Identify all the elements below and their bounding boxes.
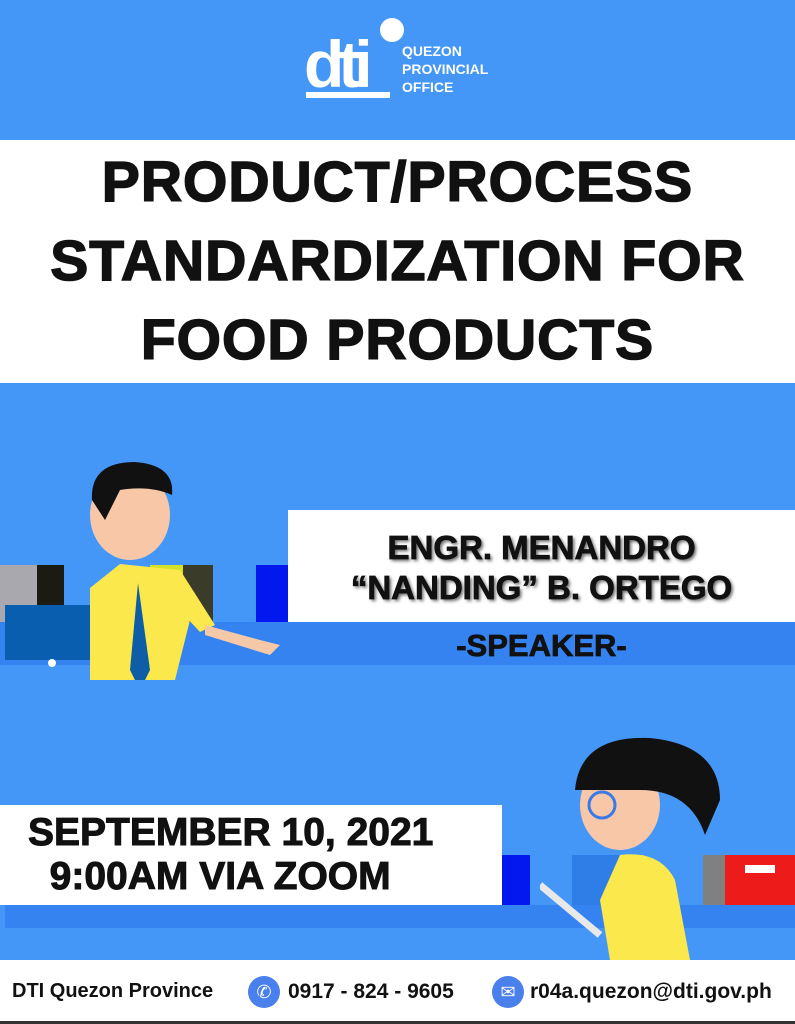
speaker label: -SPEAKER- <box>456 628 627 663</box>
footer <box>0 960 795 1024</box>
boxes bottom shelf <box>502 855 795 905</box>
icon: email <box>492 976 524 1008</box>
logo: text <box>402 43 488 95</box>
icon: phone <box>248 976 280 1008</box>
woman illustration <box>540 738 720 960</box>
title text: STANDARDIZATION FOR <box>50 229 745 293</box>
date text: SEPTEMBER 10, 2021 <box>28 811 433 854</box>
footer: organization: DTI Quezon Province <box>12 980 213 1002</box>
logo <box>304 18 488 101</box>
logo: text: QUEZON <box>402 43 462 59</box>
speaker name: ENGR. MENANDRO <box>387 529 696 566</box>
footer: email: r04a.quezon@dti.gov.ph <box>530 980 772 1003</box>
boxes on top shelf <box>0 565 288 622</box>
date text: 9:00AM VIA ZOOM <box>50 855 391 898</box>
shelf bottom <box>5 905 795 928</box>
speaker name <box>351 529 735 606</box>
footer: phone: 0917 - 824 - 9605 <box>288 980 454 1003</box>
title band <box>0 140 795 383</box>
title text <box>50 150 745 372</box>
icon: phone: ✆ <box>256 982 272 1002</box>
man illustration <box>5 462 280 680</box>
speaker name: “NANDING” B. ORTEGO <box>351 569 732 606</box>
speaker box <box>288 510 795 622</box>
logo: text: OFFICE <box>402 79 453 95</box>
title text: FOOD PRODUCTS <box>141 308 654 372</box>
logo: globe <box>380 18 404 42</box>
title text: PRODUCT/PROCESS <box>102 150 693 214</box>
shelf top <box>0 622 795 665</box>
logo: dti mark: dti <box>304 27 367 101</box>
date box <box>0 805 502 905</box>
logo: text: PROVINCIAL <box>402 61 488 77</box>
date text <box>28 811 433 898</box>
icon: email: ✉ <box>500 982 516 1002</box>
